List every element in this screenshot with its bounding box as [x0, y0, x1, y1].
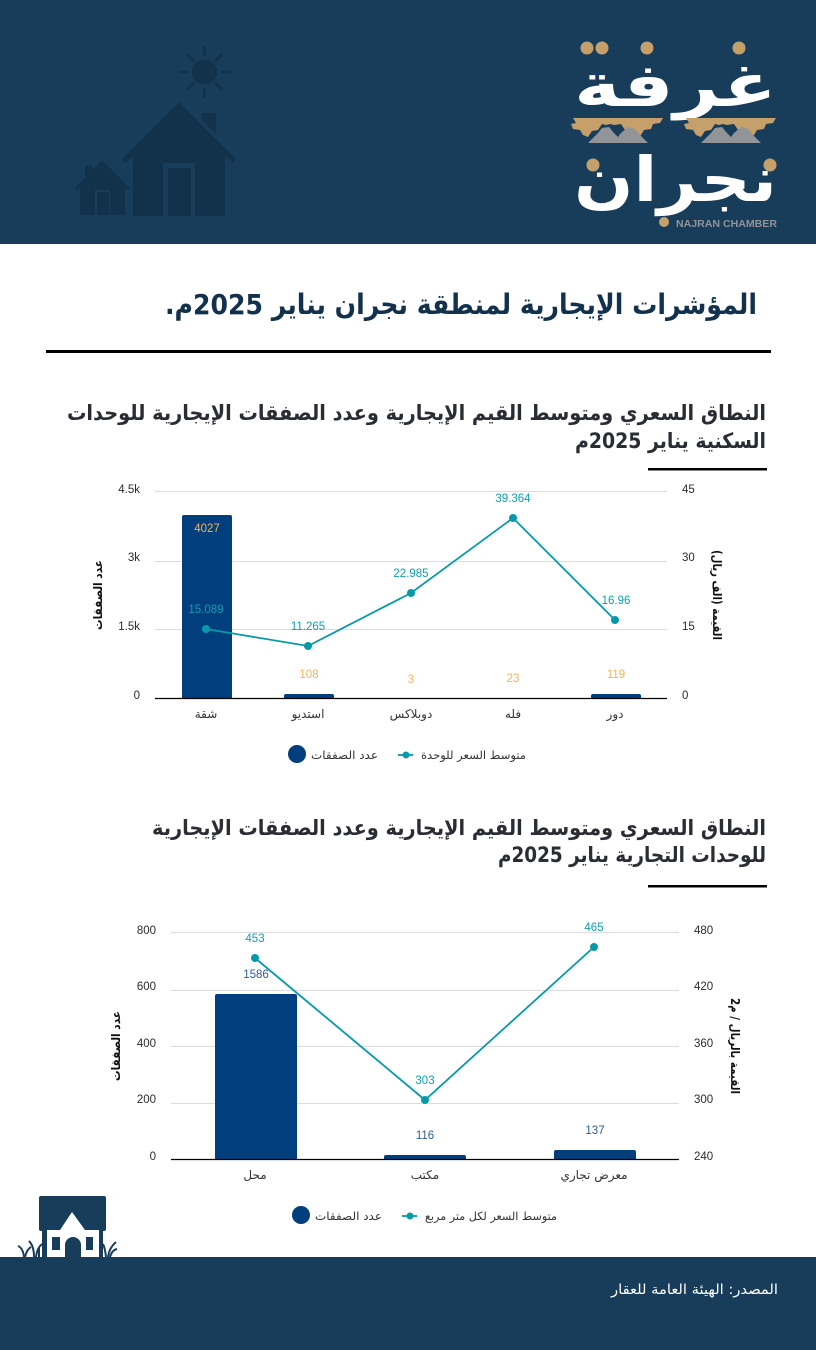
category labels: استديو [291, 707, 324, 722]
legend: عدد الصفقات [315, 1209, 382, 1223]
category labels: فله [505, 707, 521, 721]
bars: number of deals [215, 994, 636, 1159]
right axis labels: 360 [694, 1038, 713, 1050]
price value labels: 453 [245, 933, 265, 945]
icon: footer house [18, 1196, 117, 1257]
legend: متوسط السعر لكل متر مربع [425, 1209, 557, 1224]
deal value labels: 1586 [243, 969, 269, 981]
logo: Najran Chamber [571, 42, 778, 230]
legend [288, 745, 526, 763]
category labels: شقة [195, 707, 217, 721]
deal value labels: 119 [607, 669, 625, 681]
left axis labels [118, 484, 140, 702]
deal value labels: 116 [416, 1130, 434, 1142]
price value labels: 11.265 [291, 621, 325, 633]
right axis labels: 0 [682, 690, 688, 702]
right axis labels: 240 [694, 1151, 713, 1163]
price value labels: 39.364 [495, 493, 531, 505]
chart: commercial units [109, 922, 742, 1224]
left axis labels: 600 [137, 981, 156, 993]
right axis title: القيمة بالريال / م2 [727, 998, 742, 1094]
price value labels: 15.089 [188, 604, 224, 616]
right axis labels: 45 [682, 484, 695, 496]
left axis labels: 200 [137, 1094, 156, 1106]
logo caption: NAJRAN CHAMBER [676, 219, 778, 230]
price value labels: 303 [415, 1075, 435, 1087]
category labels: معرض تجاري [560, 1168, 628, 1183]
left axis labels [137, 925, 156, 1163]
left axis labels: 800 [137, 925, 156, 937]
deal value labels: 3 [408, 674, 414, 686]
right axis labels: 480 [694, 925, 713, 937]
deal value labels: 108 [299, 669, 319, 681]
main title: المؤشرات الإيجارية لمنطقة نجران يناير 2025م. [165, 288, 757, 321]
deal value labels: 23 [507, 673, 519, 685]
category labels: دور [606, 707, 623, 722]
category labels: محل [243, 1168, 267, 1182]
line: average unit price [202, 514, 619, 650]
title rule [46, 350, 771, 353]
category labels [243, 1168, 628, 1183]
footer band [0, 1257, 816, 1350]
logo wordmark: Najran: نجران [574, 143, 777, 216]
left axis title: عدد الصفقات [109, 1011, 123, 1081]
right axis title: القيمة (الف ريال) [710, 550, 724, 640]
deal value labels [194, 523, 625, 686]
right axis labels: 420 [694, 981, 713, 993]
left axis labels: 0 [134, 690, 140, 702]
logo ornament [571, 118, 776, 143]
price value labels: 22.985 [393, 568, 429, 580]
category labels: دوبلاكس [390, 707, 432, 722]
right axis labels: 300 [694, 1094, 713, 1106]
legend [292, 1206, 557, 1224]
legend: متوسط السعر للوحدة [421, 748, 526, 763]
price value labels [245, 922, 604, 1087]
deal value labels: 4027 [194, 523, 220, 535]
right axis labels: 30 [682, 552, 695, 564]
logo dots [580, 42, 776, 227]
category labels: مكتب [411, 1168, 439, 1182]
heading: residential chart: السكنية يناير 2025م [575, 429, 766, 453]
deal value labels: 137 [585, 1125, 605, 1137]
header band [0, 0, 816, 244]
left axis labels: 400 [137, 1038, 156, 1050]
left axis labels: 1.5k [118, 621, 140, 633]
heading: commercial chart: النطاق السعري ومتوسط القيم الإيجارية وعدد الصفقات الإيجارية [152, 816, 766, 841]
heading: commercial chart: للوحدات التجارية يناير 2025م [498, 843, 766, 867]
price value labels [188, 493, 630, 633]
left axis labels: 0 [150, 1151, 156, 1163]
source note: المصدر: الهيئة العامة للعقار [610, 1282, 778, 1298]
right axis labels: 15 [682, 621, 695, 633]
heading: residential chart [67, 401, 766, 453]
price value labels: 465 [584, 922, 604, 934]
chart: residential units [91, 484, 724, 763]
left axis labels: 3k [128, 552, 140, 564]
heading: residential chart: النطاق السعري ومتوسط القيم الإيجارية وعدد الصفقات الإيجارية للوحدات [67, 401, 766, 426]
left axis labels: 4.5k [118, 484, 140, 496]
deal value labels [243, 969, 605, 1142]
category labels [195, 707, 623, 722]
bars: number of deals [182, 515, 641, 698]
line: average price per square metre [251, 943, 598, 1104]
price value labels: 16.96 [602, 595, 630, 607]
legend: عدد الصفقات [311, 748, 378, 762]
heading: commercial chart [152, 816, 766, 867]
icon: houses and sun [75, 47, 236, 216]
logo wordmark: chamber: غرفة [574, 51, 777, 121]
right axis labels [694, 925, 713, 1163]
left axis title: عدد الصفقات [91, 560, 105, 630]
right axis labels [682, 484, 695, 702]
